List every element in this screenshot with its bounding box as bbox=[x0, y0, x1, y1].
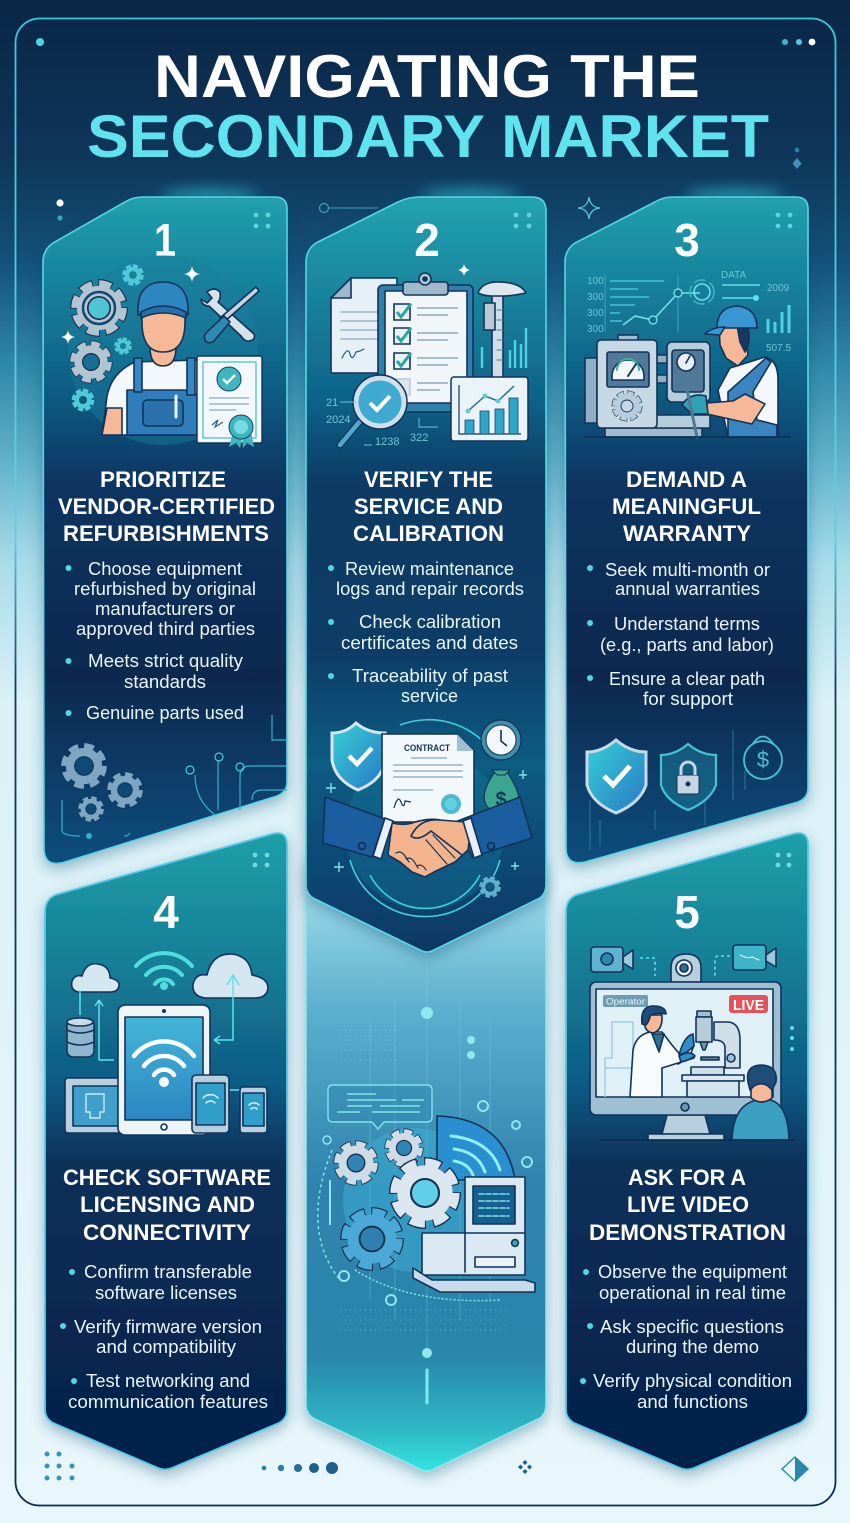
small figures: 2024 bbox=[326, 414, 350, 426]
scientist bbox=[630, 1006, 695, 1097]
footer decorations bbox=[44, 1452, 808, 1481]
wifi dome bbox=[437, 1116, 515, 1180]
bullets 1 bbox=[66, 559, 256, 723]
bullets 4: software licenses bbox=[95, 1283, 237, 1303]
chart card bbox=[451, 377, 528, 441]
heading 5 bbox=[589, 1165, 786, 1245]
heading 3: DEMAND A bbox=[626, 467, 747, 492]
bullets 1: refurbished by original bbox=[74, 579, 256, 599]
number 2: 2 bbox=[414, 214, 440, 266]
bullets 5: Observe the equipment bbox=[598, 1262, 787, 1282]
number 3: 3 bbox=[674, 214, 700, 266]
bullets 5: during the demo bbox=[626, 1337, 759, 1357]
bullets 2 bbox=[328, 559, 524, 706]
icon: certified technician bbox=[61, 255, 262, 448]
title: NAVIGATING THE bbox=[154, 43, 700, 110]
heading 2: CALIBRATION bbox=[353, 521, 504, 546]
dollar coin: $ bbox=[757, 747, 769, 772]
heading 4 bbox=[63, 1165, 271, 1245]
heading 3: MEANINGFUL bbox=[612, 494, 761, 519]
bullets 3: Understand terms bbox=[614, 614, 760, 634]
bullets 2: Check calibration bbox=[359, 612, 501, 632]
small figures: 21 bbox=[326, 397, 338, 409]
heading 3 bbox=[612, 467, 761, 546]
bullets 3: (e.g., parts and labor) bbox=[600, 635, 774, 655]
operator tag: Operator bbox=[606, 996, 645, 1008]
title bbox=[87, 43, 769, 170]
panel: lower middle illustration column bbox=[306, 860, 546, 1471]
decorative dots near title bbox=[36, 38, 815, 221]
panel 3 bbox=[44, 197, 808, 1481]
caliper bbox=[478, 282, 526, 378]
heading 5: DEMONSTRATION bbox=[589, 1220, 786, 1245]
machine bbox=[585, 335, 710, 437]
bullets 5: and functions bbox=[637, 1392, 748, 1412]
data chart: 2009 bbox=[767, 283, 790, 294]
heading 2: SERVICE AND bbox=[354, 494, 503, 519]
bullets 1: manufacturers or bbox=[95, 599, 235, 619]
heading 1: REFURBISHMENTS bbox=[63, 521, 269, 546]
heading 5: ASK FOR A bbox=[628, 1165, 746, 1190]
live tag: LIVE bbox=[733, 997, 764, 1014]
worker body bbox=[102, 282, 197, 435]
bullets 2: Review maintenance bbox=[345, 559, 514, 579]
microscope bbox=[682, 1011, 744, 1097]
glow behind gears bbox=[343, 1128, 487, 1272]
data chart: 300 bbox=[587, 308, 604, 319]
bullets 1: Genuine parts used bbox=[86, 703, 244, 723]
heading 4: CONNECTIVITY bbox=[83, 1220, 251, 1245]
data chart: 300 bbox=[587, 324, 604, 335]
handshake bbox=[323, 797, 532, 877]
small figures: 322 bbox=[410, 432, 428, 444]
money bag: $ bbox=[495, 789, 507, 811]
bullets 5: operational in real time bbox=[599, 1283, 786, 1303]
bullets 2: Traceability of past bbox=[352, 666, 508, 686]
dot grid bbox=[253, 853, 269, 867]
money bag bbox=[484, 770, 519, 812]
number 1: 1 bbox=[154, 214, 176, 266]
data chart: 507.5 bbox=[766, 343, 791, 354]
title: SECONDARY MARKET bbox=[87, 103, 769, 170]
clouds bbox=[72, 954, 268, 998]
bullets 4: Verify firmware version bbox=[74, 1317, 262, 1337]
heading 3: WARRANTY bbox=[623, 521, 751, 546]
bullets 1: Meets strict quality bbox=[88, 651, 243, 671]
bullets 2: service bbox=[401, 686, 458, 706]
panel 2 bbox=[44, 197, 808, 1481]
dot grid bbox=[776, 213, 792, 228]
bullets 3: Seek multi-month or bbox=[605, 560, 770, 580]
bullets 3: annual warranties bbox=[615, 579, 760, 599]
bullets 3: for support bbox=[643, 689, 733, 709]
shield check bbox=[587, 740, 646, 813]
bullets 4: Confirm transferable bbox=[84, 1262, 252, 1282]
clock bbox=[481, 720, 521, 760]
heading 1 bbox=[58, 467, 275, 546]
clipboard bbox=[378, 273, 473, 412]
data chart: 300 bbox=[587, 292, 604, 303]
bullets 2: logs and repair records bbox=[336, 579, 524, 599]
certificate bbox=[197, 356, 262, 448]
worker bbox=[682, 306, 778, 437]
dot matrix bbox=[44, 1452, 74, 1480]
monitor bbox=[590, 982, 781, 1140]
heading 4: CHECK SOFTWARE bbox=[63, 1165, 271, 1190]
bullets 3 bbox=[587, 560, 774, 709]
magnifier bbox=[340, 375, 407, 445]
panel 4 bbox=[44, 833, 808, 1481]
bullets 4 bbox=[60, 1262, 268, 1412]
bullets 5: Ask specific questions bbox=[600, 1317, 784, 1337]
bullets 4: and compatibility bbox=[96, 1337, 236, 1357]
icon: connected devices bbox=[65, 953, 268, 1135]
gears and circuit decoration 1 bbox=[62, 715, 287, 839]
heading 1: VENDOR-CERTIFIED bbox=[58, 494, 275, 519]
dot grid bbox=[254, 213, 270, 228]
viewer bbox=[732, 1065, 789, 1140]
bullets 5 bbox=[580, 1262, 792, 1412]
server machine bbox=[413, 1177, 535, 1292]
checklist rows bbox=[394, 304, 458, 395]
heading 2: VERIFY THE bbox=[364, 467, 493, 492]
bullets 2: certificates and dates bbox=[341, 633, 518, 653]
heading 4: LICENSING AND bbox=[80, 1192, 255, 1217]
lab background bbox=[605, 1022, 640, 1097]
dot grid bbox=[776, 853, 791, 867]
bullets 1: approved third parties bbox=[76, 619, 255, 639]
gears bbox=[337, 1132, 455, 1266]
shield padlock bbox=[661, 744, 716, 810]
top wifi bbox=[136, 953, 192, 990]
contract sheet: CONTRACT bbox=[404, 743, 450, 753]
progress dots bbox=[262, 1462, 338, 1474]
heading 5: LIVE VIDEO bbox=[627, 1192, 749, 1217]
icon: machine inspection bbox=[584, 270, 791, 437]
contract sheet bbox=[382, 734, 474, 822]
panel 1 bbox=[43, 197, 808, 1481]
icon: contract and handshake bbox=[323, 720, 532, 917]
speech bubble bbox=[328, 1085, 432, 1129]
dashed arcs bbox=[318, 1101, 532, 1305]
panel glows bbox=[160, 190, 785, 200]
wrench and screwdriver bbox=[201, 287, 259, 343]
phones bbox=[192, 1075, 267, 1133]
icons: warranty shields and dollar bbox=[587, 730, 782, 850]
data chart: DATA bbox=[721, 270, 747, 281]
half diamond bbox=[782, 1457, 808, 1481]
bullets 5: Verify physical condition bbox=[593, 1371, 792, 1391]
connector arrows bbox=[80, 975, 254, 1110]
circuit lines and nodes bbox=[340, 955, 510, 1403]
small figures bbox=[326, 397, 438, 448]
shield bbox=[332, 723, 385, 790]
number 5: 5 bbox=[674, 886, 700, 938]
small figures: 1238 bbox=[375, 436, 399, 448]
cameras bbox=[591, 945, 776, 982]
bullets 4: Test networking and bbox=[86, 1371, 250, 1391]
laptop bbox=[65, 1078, 125, 1133]
heading 2 bbox=[353, 467, 504, 546]
bullets 1: Choose equipment bbox=[88, 559, 242, 579]
dollar coin bbox=[744, 736, 782, 779]
icon: live video monitor bbox=[590, 945, 795, 1140]
data chart: 100 bbox=[587, 276, 604, 287]
tablet wifi bbox=[134, 1041, 194, 1087]
sparkle bbox=[518, 1460, 532, 1474]
heading 1: PRIORITIZE bbox=[100, 467, 226, 492]
number 4: 4 bbox=[153, 886, 179, 938]
tablet bbox=[118, 1005, 210, 1135]
bullets 4: communication features bbox=[68, 1392, 268, 1412]
dot grid bbox=[514, 213, 531, 228]
database bbox=[67, 1018, 94, 1057]
panel 5 bbox=[44, 833, 808, 1481]
icon: checklist and calibration bbox=[326, 264, 528, 448]
bullets 3: Ensure a clear path bbox=[609, 669, 765, 689]
document bbox=[331, 278, 397, 373]
data chart bbox=[587, 270, 791, 354]
bullets 1: standards bbox=[124, 672, 206, 692]
